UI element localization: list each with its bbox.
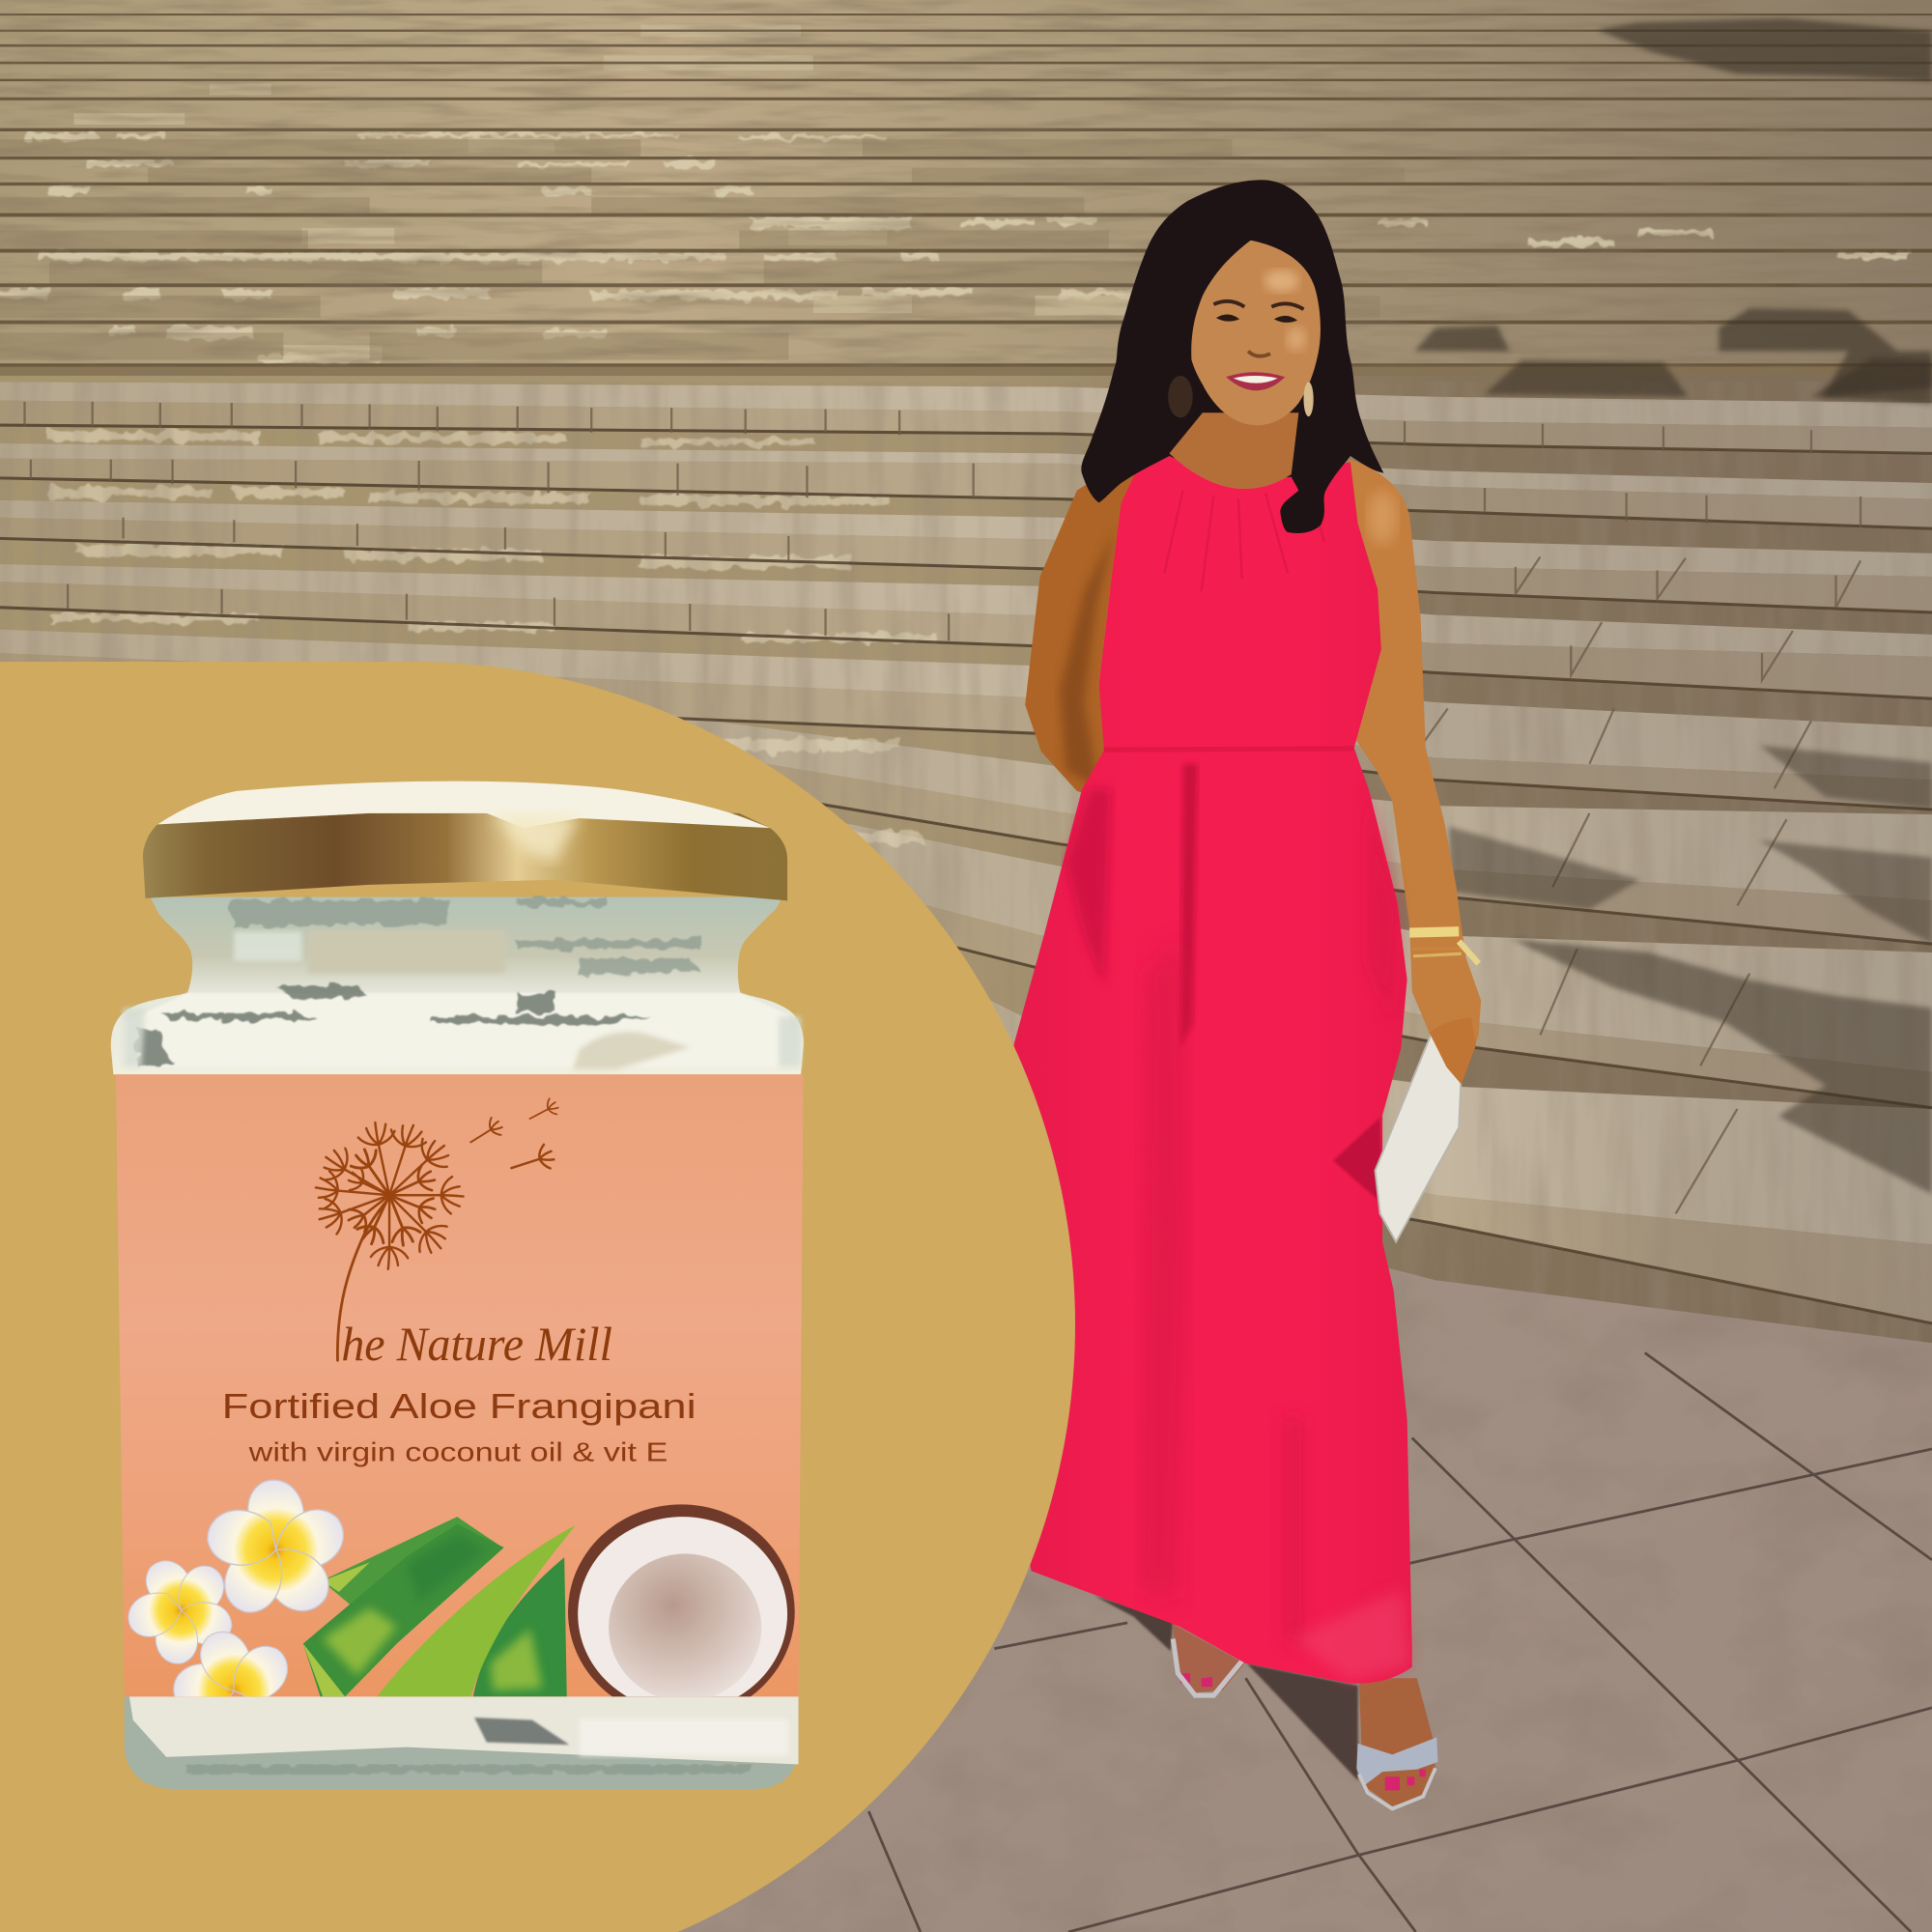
- dark lines under step fronts: [0, 425, 1932, 1323]
- dress folds and shadows: [1065, 480, 1410, 1681]
- shadows cast on the steps: [1414, 18, 1932, 1194]
- left foot and sandal: [1173, 1624, 1244, 1695]
- block joints: [25, 402, 1861, 1213]
- ground shadow: [1094, 1596, 1358, 1780]
- hair: [1081, 180, 1383, 533]
- neck: [1169, 412, 1298, 489]
- vertical weathering streaks: [0, 382, 1932, 1343]
- darker block faces: [0, 139, 1405, 359]
- product subtitle: with virgin coconut oil & vit E: [247, 1437, 668, 1467]
- earrings: [1168, 376, 1314, 417]
- coconut illustration: [568, 1504, 795, 1719]
- arm sheen: [1368, 491, 1397, 545]
- background: upper thin stone steps: [0, 0, 1932, 388]
- bright block faces: [74, 25, 1133, 362]
- stone grain: [0, 0, 1932, 388]
- dress: [985, 453, 1412, 1684]
- step front faces: [0, 401, 1932, 1323]
- hand over clutch: [1430, 1018, 1476, 1084]
- right leg and sandal: [1356, 1678, 1438, 1808]
- frangipani flowers illustration: [128, 1480, 344, 1696]
- jar lid: [143, 781, 787, 900]
- pale riser flakes on the left: [49, 431, 936, 844]
- facial features: [1213, 270, 1306, 390]
- background: paved ground: [678, 1267, 1932, 1932]
- bracelets: [1409, 931, 1479, 963]
- right arm: [1348, 458, 1481, 1084]
- dirt band: [0, 366, 1932, 384]
- background: wide stone steps: [0, 376, 1932, 1361]
- left arm: [1025, 453, 1144, 801]
- left arm inner shade: [1060, 529, 1115, 788]
- face: [1191, 241, 1321, 425]
- flaky pale mortar patches: [0, 133, 1910, 363]
- step shadow lines: [0, 14, 1932, 367]
- dandelion logo: [314, 1097, 560, 1360]
- white clutch: [1375, 1033, 1462, 1242]
- reflections in the glass: [124, 899, 801, 1069]
- jar base: [125, 1682, 799, 1789]
- woman in red dress: [985, 180, 1481, 1808]
- brand name: he Nature Mill: [341, 1318, 612, 1371]
- jar glass body: [111, 897, 804, 1074]
- product name: Fortified Aloe Frangipani: [222, 1387, 696, 1426]
- aloe leaves illustration: [303, 1517, 576, 1696]
- product jar: [111, 781, 804, 1789]
- jar label: [116, 1074, 804, 1696]
- gold panel: [0, 662, 1075, 1932]
- step tops: [0, 382, 1932, 1244]
